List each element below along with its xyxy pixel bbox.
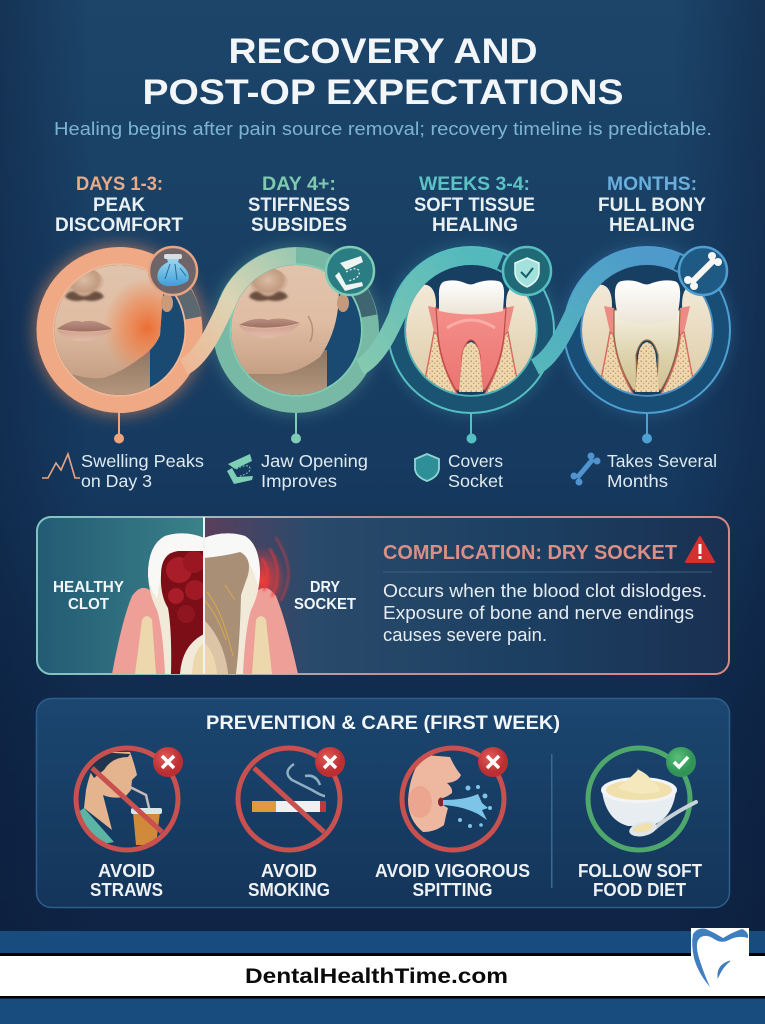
- label: healthy clot: [53, 579, 124, 613]
- item: avoid smoking: SMOKING: [248, 880, 330, 900]
- timeline headings: SUBSIDES: [251, 214, 347, 236]
- illustration: healthy lower face: [231, 265, 361, 395]
- connector stem: [291, 413, 301, 444]
- item: avoid smoking: [238, 747, 345, 900]
- ribbon connector 1 to 2: [184, 256, 296, 367]
- item: avoid straws: AVOID: [98, 861, 155, 881]
- title: [142, 32, 624, 112]
- subtitle: Healing begins after pain source removal; recovery timeline is predictable.: [54, 119, 712, 139]
- title: RECOVERY AND: [228, 32, 538, 71]
- stage 1: peak discomfort: [46, 247, 197, 444]
- timeline headings: [55, 173, 706, 236]
- illustration: swollen lower face: [54, 265, 184, 395]
- caption: several months: Months: [607, 471, 668, 491]
- dry socket half: [204, 533, 260, 674]
- icon: face spitting water: [402, 748, 504, 850]
- connector stem: [466, 413, 476, 444]
- icon badge: jaw: [326, 247, 374, 295]
- illustration: split tooth healthy clot vs dry socket: [112, 517, 298, 674]
- item: avoid straws: [74, 747, 183, 900]
- ribbon connector 3 to 4: [535, 256, 677, 367]
- panel: prevention and care: [36, 698, 730, 908]
- gums and bone: [112, 546, 298, 674]
- timeline headings: SOFT TISSUE: [414, 194, 535, 216]
- ring glows: [44, 254, 723, 406]
- item: avoid smoking: AVOID: [261, 861, 317, 881]
- icon: warning triangle: [686, 537, 714, 562]
- caption: several months: Takes Several: [607, 451, 717, 471]
- item: follow soft food diet: [578, 747, 702, 900]
- caption: jaw opening: Jaw Opening: [261, 451, 368, 471]
- complication description: Occurs when the blood clot dislodges.: [383, 580, 707, 601]
- caption: covers socket: Socket: [448, 471, 503, 491]
- caption: swelling peaks: on Day 3: [81, 471, 152, 491]
- illustration: fully healed tooth and bone: [581, 264, 713, 396]
- ring: [564, 247, 730, 413]
- stage 4: full bony healing: [564, 247, 730, 444]
- badge: x: [315, 747, 345, 777]
- divider: [203, 517, 205, 674]
- icon badge: ice pack: [149, 247, 197, 295]
- healthy half: [148, 533, 205, 674]
- footer band: [0, 928, 765, 1024]
- website url: DentalHealthTime.com: [245, 965, 508, 988]
- badge: check: [666, 747, 696, 777]
- timeline headings: STIFFNESS: [248, 194, 350, 216]
- complication description: [383, 580, 707, 645]
- timeline headings: WEEKS 3-4:: [419, 173, 530, 195]
- timeline headings: PEAK: [93, 194, 145, 216]
- caption: several months: [570, 451, 717, 491]
- caption: jaw opening: [227, 451, 368, 491]
- timeline headings: DISCOMFORT: [55, 214, 183, 236]
- title: POST-OP EXPECTATIONS: [142, 73, 624, 112]
- complication heading: COMPLICATION: DRY SOCKET: [383, 542, 677, 564]
- ring: [388, 247, 554, 413]
- item: avoid vigorous spitting: AVOID VIGOROUS: [375, 861, 530, 881]
- panel: dry socket complication: [36, 516, 730, 675]
- item: follow soft food diet: FOLLOW SOFT: [578, 861, 702, 881]
- label: dry socket: SOCKET: [294, 596, 356, 613]
- ribbon connector 2 to 3: [360, 256, 500, 367]
- icon badge: shield: [503, 247, 551, 295]
- item: avoid vigorous spitting: SPITTING: [412, 880, 492, 900]
- stage 3: soft tissue healing: [388, 247, 554, 444]
- icon: person drinking with straw: [74, 748, 178, 850]
- illustration: gum healing over socket: [405, 264, 537, 396]
- timeline headings: MONTHS:: [607, 173, 697, 195]
- caption: covers socket: Covers: [448, 451, 503, 471]
- icon: bowl of soft food with spoon: [588, 748, 696, 850]
- caption: covers socket: [415, 451, 503, 491]
- item: follow soft food diet: FOOD DIET: [593, 880, 686, 900]
- label: healthy clot: CLOT: [68, 596, 109, 613]
- item: avoid vigorous spitting: [375, 747, 530, 900]
- timeline headings: FULL BONY: [598, 194, 706, 216]
- ring: [222, 256, 370, 404]
- timeline headings: HEALING: [432, 214, 518, 236]
- caption: swelling peaks: Swelling Peaks: [81, 451, 204, 471]
- badge: x: [153, 747, 183, 777]
- timeline headings: DAYS 1-3:: [76, 173, 163, 195]
- complication description: Exposure of bone and nerve endings: [383, 602, 694, 623]
- logo: tooth: [691, 928, 749, 987]
- connector stem: [642, 413, 652, 444]
- complication description: causes severe pain.: [383, 624, 547, 645]
- timeline headings: DAY 4+:: [262, 173, 336, 195]
- label: dry socket: [294, 579, 356, 613]
- timeline headings: HEALING: [609, 214, 695, 236]
- icon: cigarette with smoke: [238, 748, 340, 850]
- connector stem: [114, 413, 124, 444]
- badge: x: [478, 747, 508, 777]
- caption: jaw opening: Improves: [261, 471, 337, 491]
- label: healthy clot: HEALTHY: [53, 579, 124, 596]
- icon badge: bone: [679, 247, 727, 295]
- ring: [46, 256, 194, 404]
- stage 2: stiffness subsides: [222, 247, 374, 444]
- pain waves: [262, 538, 288, 600]
- caption: swelling peaks: [42, 451, 204, 491]
- item: avoid straws: STRAWS: [90, 880, 163, 900]
- prevention heading: PREVENTION & CARE (FIRST WEEK): [206, 713, 560, 734]
- label: dry socket: DRY: [310, 579, 340, 596]
